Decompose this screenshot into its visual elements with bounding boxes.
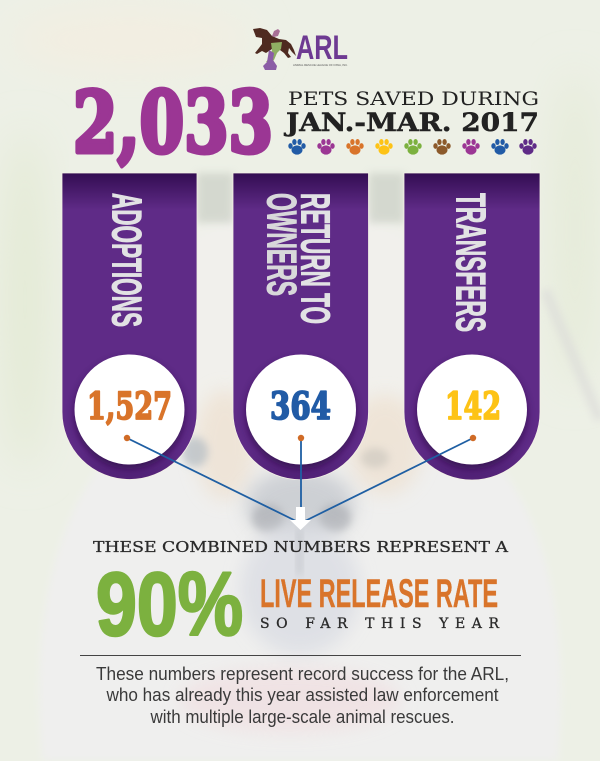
icon: white down arrow	[290, 507, 311, 530]
label: return to owners	[258, 193, 338, 324]
stat: 90 percent: 90%	[96, 555, 243, 655]
panel: transfers	[404, 173, 540, 480]
text block: closing statement: who has already this year assisted law enforcement	[106, 685, 499, 705]
circle: adoptions count	[74, 354, 184, 464]
icon: horse and pets	[253, 28, 296, 70]
paw icon row	[288, 139, 537, 155]
subhead line 1: PETS SAVED DURING	[288, 88, 539, 110]
circle: return to owners count: 364	[270, 384, 331, 428]
connector lines to arrow	[124, 435, 476, 521]
label: adoptions: ADOPTIONS	[104, 193, 150, 327]
circle: return to owners count	[246, 354, 356, 464]
panel: return to owners	[233, 173, 368, 480]
text block: closing statement: These numbers represent record success for the ARL,	[96, 664, 509, 684]
text: combined numbers intro: THESE COMBINED NUMBERS REPRESENT A	[93, 538, 508, 556]
circle: transfers count: 142	[445, 384, 501, 428]
text: so far this year: SO FAR THIS YEAR	[260, 616, 499, 632]
logo tagline: ANIMAL RESCUE LEAGUE OF IOWA, INC.	[293, 63, 348, 67]
label: transfers: TRANSFERS	[448, 193, 494, 332]
circle: adoptions count: 1,527	[87, 384, 172, 428]
label: return to owners: RETURN TO	[292, 193, 338, 324]
headline: total pets saved	[73, 73, 539, 172]
circle: transfers count	[417, 354, 527, 464]
logo: ARL	[253, 28, 348, 70]
subhead line 2: JAN.-MAR. 2017	[284, 108, 539, 137]
text block: closing statement	[96, 664, 509, 727]
text block: closing statement: with multiple large-scale animal rescues.	[150, 707, 454, 727]
big number: 2,033	[73, 73, 273, 172]
label: return to owners: OWNERS	[258, 193, 306, 296]
logo wordmark: ARL	[296, 29, 348, 67]
panel: adoptions	[62, 173, 197, 480]
